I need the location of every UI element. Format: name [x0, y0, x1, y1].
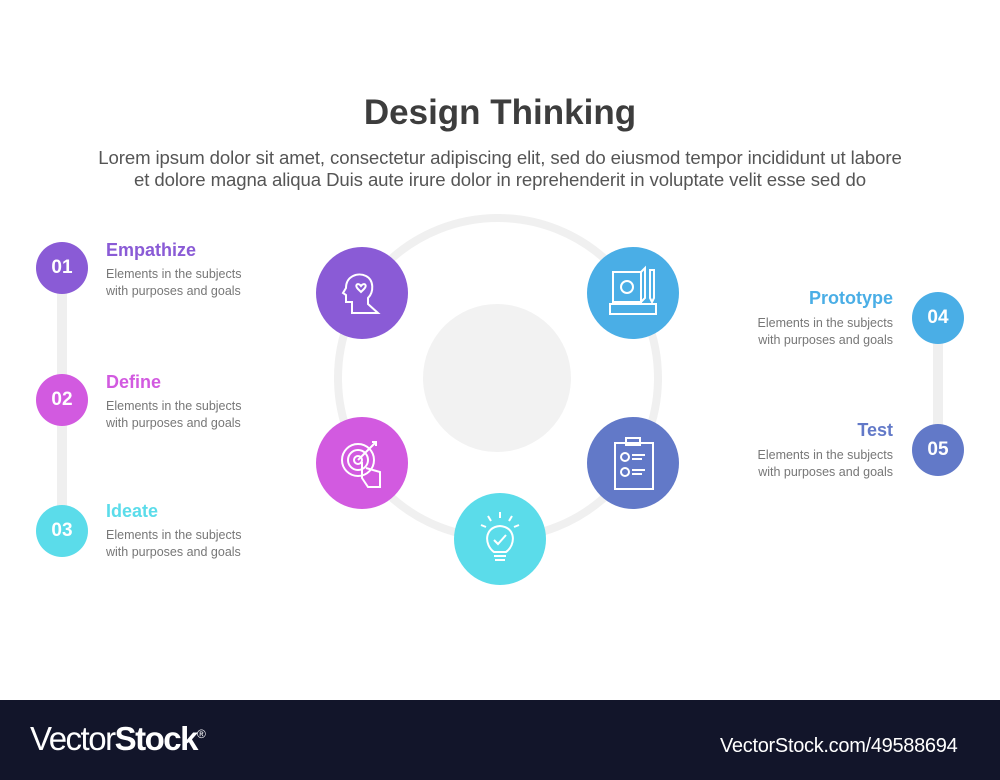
step 03: Ideate [106, 501, 158, 521]
subtitle [98, 147, 902, 190]
step 01: with purposes and goals [106, 284, 241, 298]
step 01: Empathize [106, 240, 196, 260]
step 03: Elements in the subjects [106, 528, 242, 542]
step 04: 04 [927, 307, 949, 328]
step 02: with purposes and goals [106, 416, 241, 430]
step 05 [758, 420, 964, 479]
step 01: Elements in the subjects [106, 267, 242, 281]
step 03 [36, 501, 242, 559]
step 02: 02 [51, 389, 73, 410]
step 05: with purposes and goals [758, 465, 893, 479]
step 04: with purposes and goals [758, 333, 893, 347]
step 05: Elements in the subjects [758, 448, 893, 462]
subtitle: Lorem ipsum dolor sit amet, consectetur adipiscing elit, sed do eiusmod tempor incididunt ut labore [98, 147, 902, 168]
icon: prototype blueprint [587, 247, 679, 339]
step 02: Elements in the subjects [106, 399, 242, 413]
step 04 [758, 288, 964, 347]
right connector line [933, 318, 943, 450]
step 01: 01 [51, 257, 73, 278]
left connector line [57, 268, 67, 531]
step 03: 03 [51, 520, 73, 541]
image id: VectorStock.com/49588694 [720, 735, 957, 757]
logo: VectorStock® [30, 720, 204, 757]
subtitle: et dolore magna aliqua Duis aute irure dolor in reprehenderit in voluptate velit esse sed do [134, 169, 866, 190]
title: Design Thinking [364, 93, 636, 132]
icon: test clipboard [587, 417, 679, 509]
icon: define target [316, 417, 408, 509]
step 01 [36, 240, 242, 298]
step 02: Define [106, 372, 161, 392]
icon: ideate bulb [454, 493, 546, 585]
icon: empathize head [316, 247, 408, 339]
step 04: Elements in the subjects [758, 316, 893, 330]
step 05: 05 [927, 439, 949, 460]
step 02 [36, 372, 242, 430]
step 03: with purposes and goals [106, 545, 241, 559]
footer bar [0, 700, 1000, 780]
step 04: Prototype [809, 288, 893, 308]
step 05: Test [857, 420, 893, 440]
